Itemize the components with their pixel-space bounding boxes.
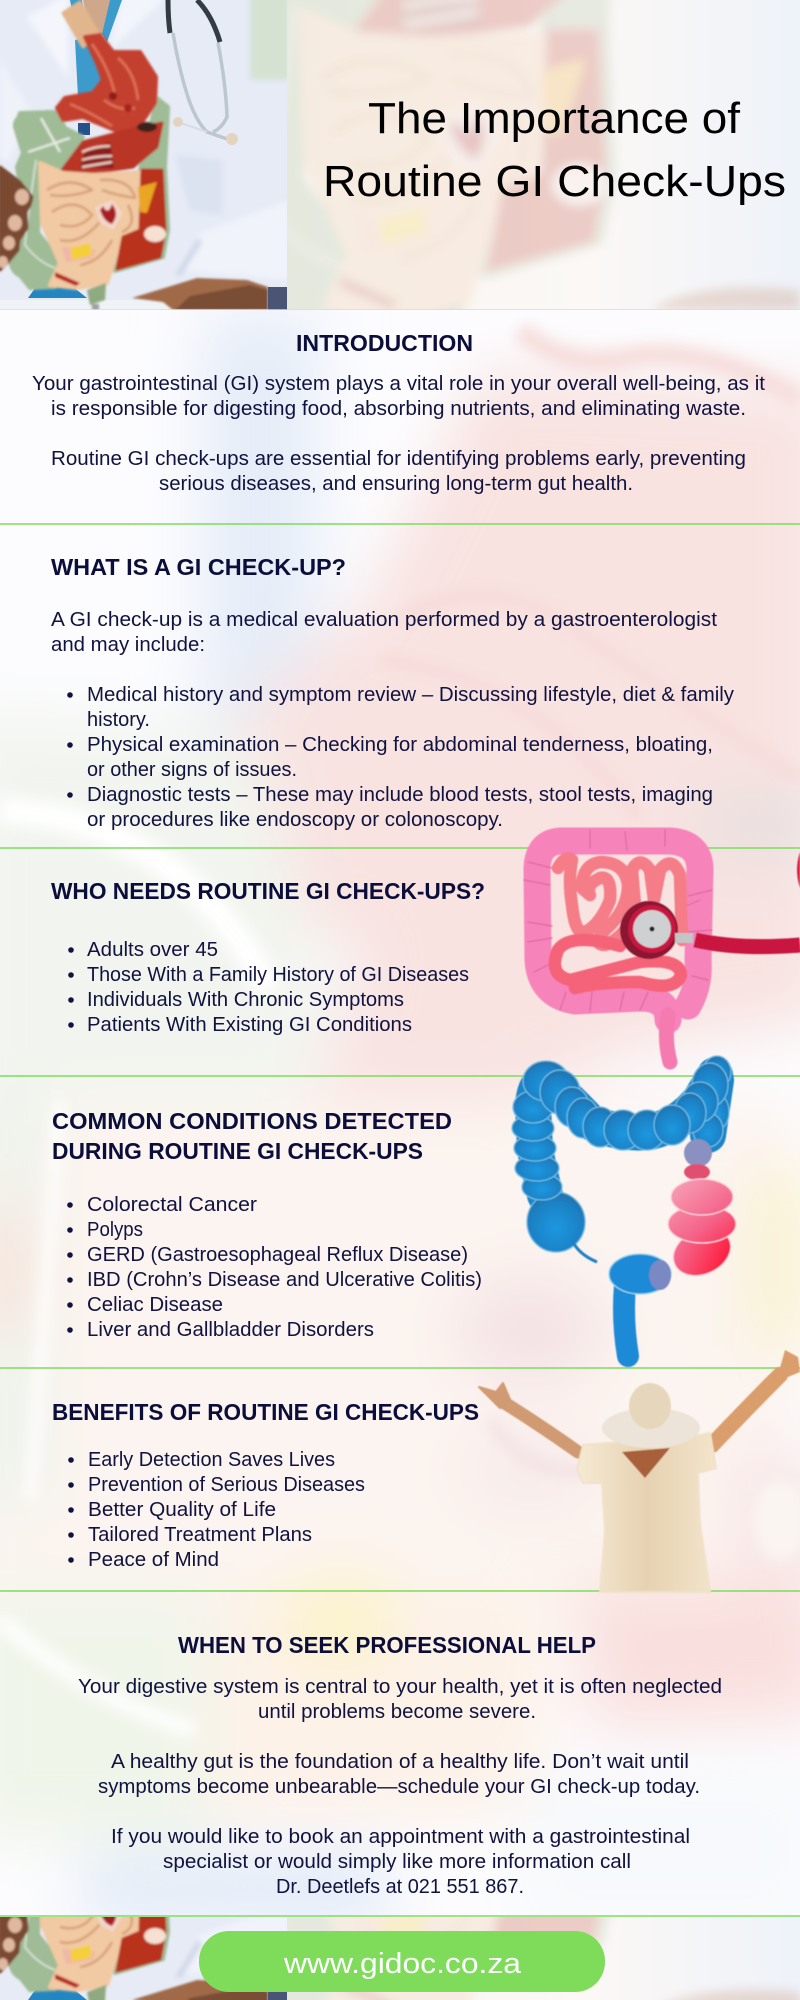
bullet list: check-up components: or other signs of issues. xyxy=(87,759,297,781)
heading: who needs check-ups: WHO NEEDS ROUTINE GI CHECK-UPS? xyxy=(51,878,485,904)
panel: when to seek help xyxy=(78,1632,722,1898)
intro text: is responsible for digesting food, absorbing nutrients, and eliminating waste. xyxy=(51,398,746,420)
section dividers xyxy=(0,524,800,1916)
closing text: A healthy gut is the foundation of a healthy life. Don’t wait until xyxy=(111,1751,689,1773)
bullet list: conditions: GERD (Gastroesophageal Reflux Disease) xyxy=(87,1244,468,1266)
bullet list: who needs check-ups: Adults over 45 xyxy=(87,939,218,961)
bullet list: who needs check-ups xyxy=(68,939,469,1036)
panel: common conditions xyxy=(52,1056,738,1356)
heading: common conditions: DURING ROUTINE GI CHECK-UPS xyxy=(52,1138,423,1164)
bullet list: benefits: Prevention of Serious Diseases xyxy=(88,1474,365,1496)
bullet list: benefits: Peace of Mind xyxy=(88,1549,219,1571)
closing text xyxy=(78,1676,722,1898)
bullet list: who needs check-ups: Patients With Existing GI Conditions xyxy=(87,1014,412,1036)
description text: A GI check-up is a medical evaluation performed by a gastroenterologist xyxy=(51,609,717,631)
bullet list: conditions: Polyps xyxy=(87,1219,143,1241)
bullet list: conditions: Liver and Gallbladder Disorders xyxy=(87,1319,374,1341)
intro text: Routine GI check-ups are essential for identifying problems early, preventing xyxy=(51,448,746,470)
website button: www.gidoc.co.za xyxy=(283,1948,522,1980)
icon: blue and red colon xyxy=(512,1056,738,1356)
hero banner xyxy=(0,0,800,310)
intro text: serious diseases, and ensuring long-term gut health. xyxy=(159,473,633,495)
heading: common conditions xyxy=(52,1108,452,1164)
closing text: until problems become severe. xyxy=(258,1701,536,1723)
heading: introduction: INTRODUCTION xyxy=(296,330,473,356)
bullet list: benefits: Tailored Treatment Plans xyxy=(88,1524,312,1546)
bullet list: check-up components: Medical history and symptom review – Discussing lifestyle, diet & family xyxy=(87,684,734,706)
closing text: If you would like to book an appointment with a gastrointestinal xyxy=(111,1826,690,1848)
panel: benefits xyxy=(52,1350,800,1592)
heading: when to seek help: WHEN TO SEEK PROFESSIONAL HELP xyxy=(178,1632,596,1658)
bullet list: benefits: Better Quality of Life xyxy=(88,1499,276,1521)
description text xyxy=(51,609,717,656)
photo: woman with raised arms xyxy=(479,1350,800,1592)
panel: who needs routine check-ups xyxy=(51,830,800,1062)
intro text xyxy=(32,373,765,495)
bullet list: check-up components: history. xyxy=(87,709,150,731)
closing text: symptoms become unbearable—schedule your GI check-up today. xyxy=(98,1776,700,1798)
title: Routine GI Check-Ups xyxy=(323,157,786,206)
bullet list: benefits xyxy=(68,1449,365,1571)
closing text: specialist or would simply like more information call xyxy=(163,1851,631,1873)
bullet list: who needs check-ups: Those With a Family History of GI Diseases xyxy=(87,964,469,986)
heading: common conditions: COMMON CONDITIONS DETECTED xyxy=(52,1108,452,1134)
bullet list: who needs check-ups: Individuals With Chronic Symptoms xyxy=(87,989,404,1011)
icon: pink intestines with stethoscope xyxy=(524,830,800,1062)
closing text: Dr. Deetlefs at 021 551 867. xyxy=(276,1876,524,1898)
website button xyxy=(199,1931,605,1992)
heading: benefits: BENEFITS OF ROUTINE GI CHECK-UPS xyxy=(52,1399,479,1425)
bullet list: check-up components: or procedures like endoscopy or colonoscopy. xyxy=(87,809,503,831)
panel: introduction xyxy=(32,330,765,495)
bullet list: check-up components: Diagnostic tests – These may include blood tests, stool tests, imaging xyxy=(87,784,713,806)
panel: what is a GI check-up xyxy=(51,554,734,831)
bullet list: check-up components xyxy=(67,684,734,831)
heading: what is a check-up: WHAT IS A GI CHECK-UP? xyxy=(51,554,346,580)
bullet list: conditions: Colorectal Cancer xyxy=(87,1194,257,1216)
closing text: Your digestive system is central to your health, yet it is often neglected xyxy=(78,1676,722,1698)
bullet list: conditions: IBD (Crohn’s Disease and Ulcerative Colitis) xyxy=(87,1269,482,1291)
intro text: Your gastrointestinal (GI) system plays a vital role in your overall well-being, as it xyxy=(32,373,765,395)
description text: and may include: xyxy=(51,634,205,656)
bullet list: check-up components: Physical examination – Checking for abdominal tenderness, bloating, xyxy=(87,734,713,756)
bullet list: conditions xyxy=(67,1194,482,1341)
footer banner xyxy=(0,1917,800,2000)
title xyxy=(323,94,786,206)
bullet list: benefits: Early Detection Saves Lives xyxy=(88,1449,335,1471)
title: The Importance of xyxy=(368,94,741,143)
bullet list: conditions: Celiac Disease xyxy=(87,1294,223,1316)
